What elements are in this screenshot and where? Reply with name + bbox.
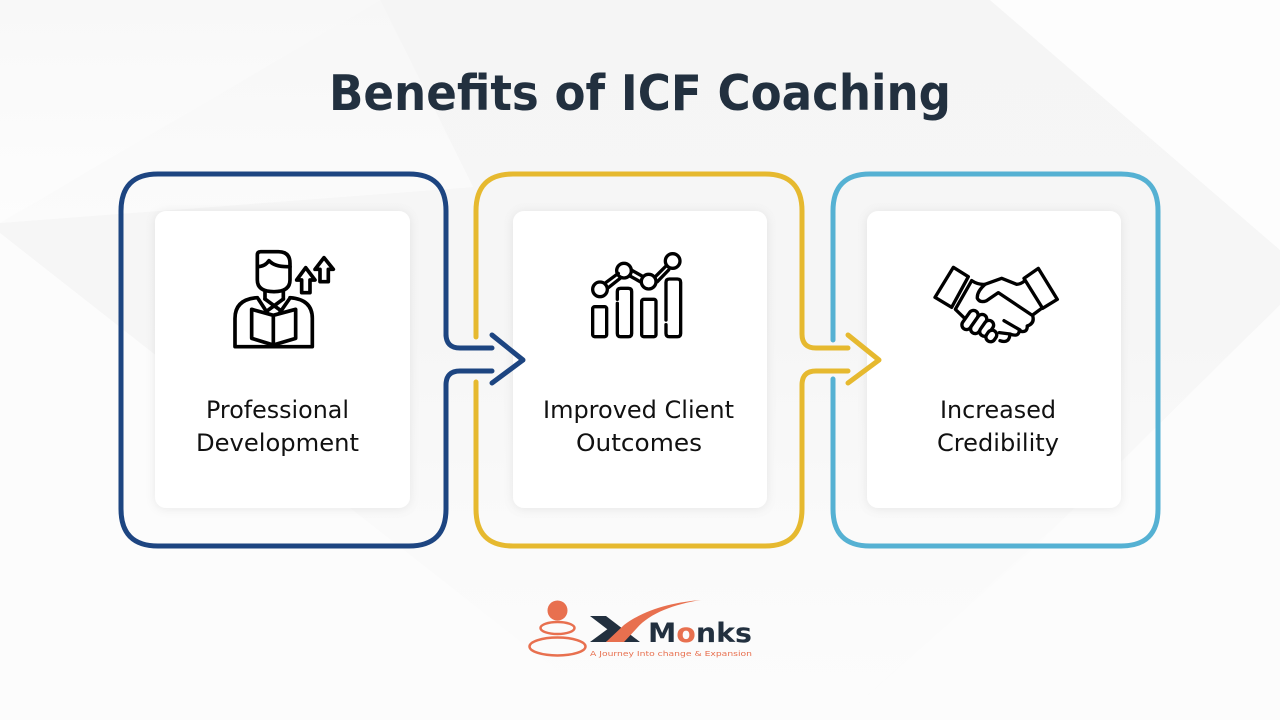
label: Improved Client [543, 396, 734, 424]
card [867, 211, 1121, 508]
icon: handshake [935, 267, 1057, 344]
icon: person reading [235, 252, 333, 347]
icon: growth chart [593, 254, 681, 337]
label [196, 396, 359, 457]
label: Development [196, 429, 359, 457]
frame: yellow with arrow [476, 174, 879, 546]
label: Increased [940, 396, 1056, 424]
label: Professional [206, 396, 349, 424]
wordmark: Monks [648, 618, 752, 649]
card [155, 211, 410, 508]
label: Credibility [937, 429, 1059, 457]
panel: increased credibility [833, 174, 1158, 546]
icon: X mark [590, 600, 701, 642]
card [513, 211, 767, 508]
panel: professional development [121, 174, 523, 546]
frame: light blue [833, 174, 1158, 546]
label [937, 396, 1059, 457]
icon: stacked stones [530, 600, 586, 656]
title: Benefits of ICF Coaching [329, 65, 951, 122]
label: Outcomes [576, 429, 702, 457]
logo: XMonks [530, 600, 752, 658]
frame: navy with arrow [121, 174, 523, 546]
label [543, 396, 734, 457]
tagline: A Journey Into change & Expansion [590, 650, 752, 658]
panel: improved client outcomes [476, 174, 879, 546]
